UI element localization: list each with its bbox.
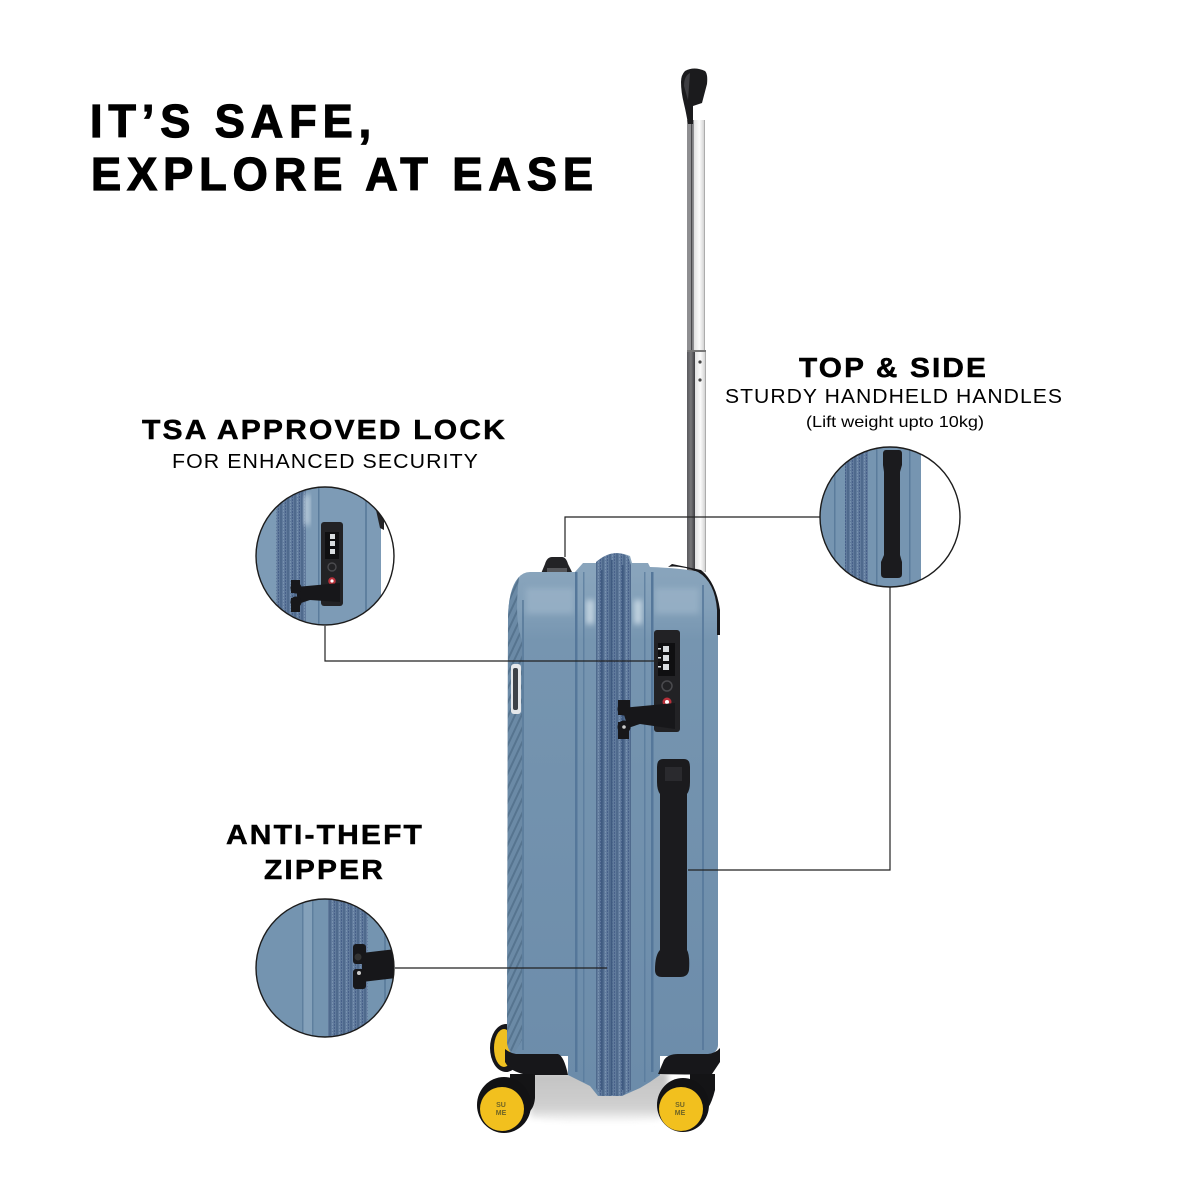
- zipper pull: [296, 583, 340, 604]
- title: [90, 95, 599, 200]
- left side texture: [507, 577, 522, 1052]
- detail circle: TSA lock: [255, 486, 394, 626]
- label: top and side handles: TOP & SIDE: [799, 352, 988, 383]
- front left wheel: SU: [496, 1102, 506, 1109]
- rear wheel: [490, 1024, 522, 1072]
- label: anti-theft zipper: ANTI-THEFT: [226, 819, 424, 850]
- detail circle: handle: [820, 447, 960, 587]
- front right wheel: SU: [675, 1102, 685, 1109]
- handle grip: [681, 68, 707, 124]
- infographic canvas: [92, 68, 1061, 1133]
- front right wheel: ME: [675, 1110, 686, 1117]
- front left wheel: [477, 1074, 535, 1133]
- floor shadow: [530, 1072, 668, 1123]
- top handle on suitcase: [540, 557, 574, 576]
- label: TSA approved lock: FOR ENHANCED SECURITY: [172, 451, 479, 473]
- label: top and side handles: [725, 352, 1063, 431]
- suitcase: [477, 68, 720, 1133]
- telescopic housing corner: [668, 564, 720, 635]
- shell highlights: [526, 588, 699, 624]
- telescopic trolley handle: [681, 68, 707, 572]
- label: top and side handles: (Lift weight upto 10kg): [806, 414, 984, 431]
- zipper band: [596, 553, 631, 1096]
- side handle: [655, 759, 690, 977]
- combination lock: [654, 630, 680, 732]
- front left wheel: ME: [496, 1110, 507, 1117]
- shell ridges: [575, 572, 704, 1082]
- shell body: [507, 553, 718, 1096]
- label: TSA approved lock: [142, 414, 507, 473]
- side silver logo badge: [511, 664, 521, 714]
- zipper pulls: [618, 700, 675, 739]
- label: anti-theft zipper: ZIPPER: [264, 854, 385, 885]
- label: top and side handles: STURDY HANDHELD HANDLES: [725, 385, 1063, 408]
- handle: [881, 450, 902, 578]
- black bottom corners: [505, 1048, 720, 1075]
- leader line: lock: [325, 626, 660, 661]
- leader line: zipper: [395, 967, 607, 969]
- zipper pull: [362, 950, 394, 982]
- title: EXPLORE AT EASE: [91, 148, 599, 200]
- label: TSA approved lock: TSA APPROVED LOCK: [142, 414, 507, 445]
- detail circle: zipper: [255, 898, 396, 1038]
- label: anti-theft zipper: [226, 819, 424, 885]
- title: IT’S SAFE,: [90, 95, 377, 147]
- leader line: handles: [565, 517, 890, 870]
- lock plate: [321, 522, 343, 606]
- front right wheel: [657, 1074, 715, 1132]
